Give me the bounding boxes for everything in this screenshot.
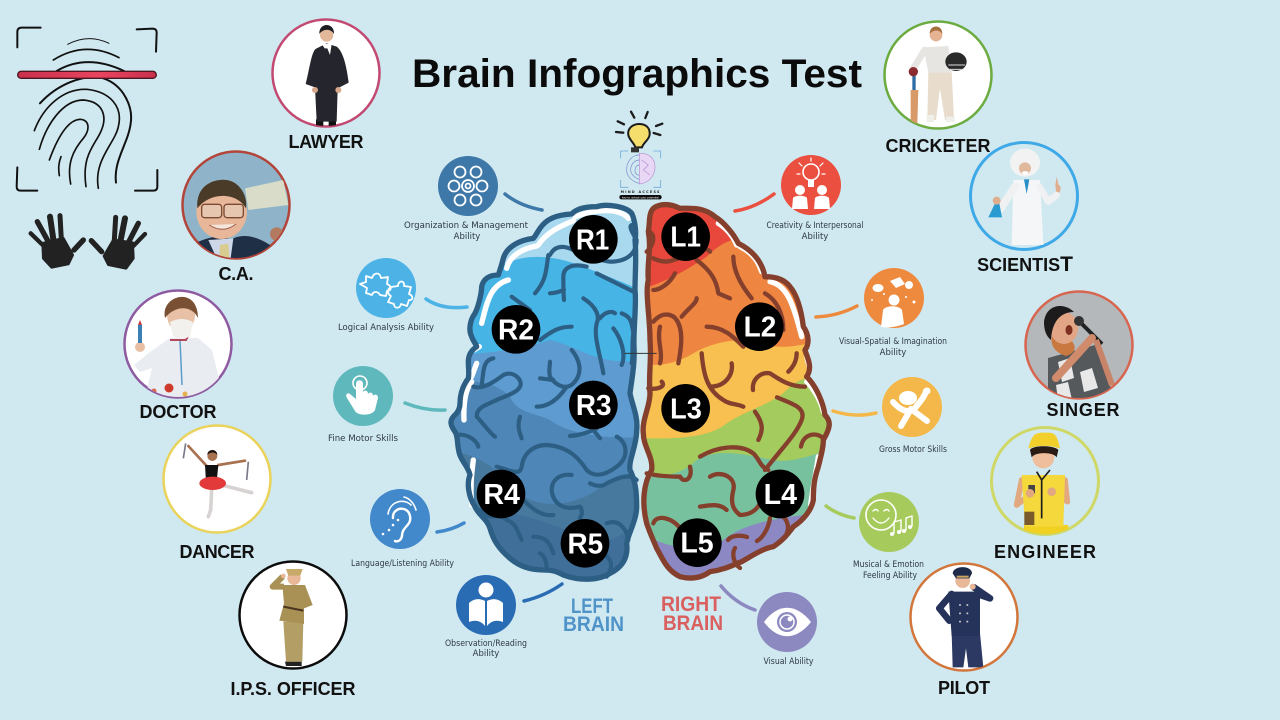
ability: creativity and interpersonal	[735, 155, 864, 242]
left hemisphere	[448, 202, 640, 582]
region badges: R5	[567, 528, 603, 560]
ability: organization and management: Organization & Management	[404, 221, 529, 231]
ability: logical analysis: Logical Analysis Ability	[338, 323, 434, 333]
ability: fine motor skills: Fine Motor Skills	[328, 434, 399, 444]
ability: organization and management: Ability	[454, 232, 480, 242]
ability: observation and reading: Observation/Reading	[445, 639, 527, 649]
ability: organization and management	[404, 156, 542, 242]
portrait: C.A.: C.A.	[218, 264, 254, 284]
ability: gross motor skills	[833, 377, 948, 455]
portrait: cricketer	[884, 22, 992, 156]
portrait: scientist: SCIENTIST	[977, 253, 1073, 276]
ability: musical and emotion feeling	[826, 492, 924, 581]
brain diagram	[440, 190, 840, 590]
portrait: singer: SINGER	[1046, 400, 1120, 420]
ability: musical and emotion feeling: Feeling Ability	[863, 571, 917, 581]
left brain label	[563, 595, 624, 636]
right hemisphere	[640, 190, 840, 590]
icon: fingerprint scanner	[17, 28, 157, 191]
ability: visual	[721, 586, 817, 667]
region badges: R4	[483, 479, 520, 511]
ability: logical analysis	[338, 258, 467, 333]
right brain label	[661, 593, 723, 635]
left brain label: LEFT	[571, 595, 613, 618]
ability: visual-spatial and imagination	[816, 268, 947, 358]
region badges: L2	[744, 312, 776, 344]
region badges: L4	[764, 479, 797, 511]
ability: creativity and interpersonal: Ability	[802, 232, 828, 242]
portrait: dancer	[164, 426, 270, 562]
right brain label: RIGHT	[661, 593, 721, 616]
region badges: R2	[498, 314, 534, 346]
portrait: lawyer: LAWYER	[288, 132, 364, 152]
ability: observation and reading	[445, 575, 562, 659]
portrait: engineer	[992, 428, 1098, 562]
portrait: dancer: DANCER	[180, 542, 254, 562]
ability: observation and reading: Ability	[473, 649, 499, 659]
portrait: singer	[1026, 292, 1132, 420]
logo: mind access bulb: MIND ACCESS	[621, 190, 660, 194]
portrait: doctor	[124, 290, 232, 422]
left brain label: BRAIN	[563, 613, 624, 636]
region badges: L5	[680, 528, 714, 560]
icon: hand prints	[31, 216, 145, 268]
region badges: R1	[576, 224, 609, 256]
ability: visual-spatial and imagination: Visual-Spatial & Imagination	[839, 337, 947, 347]
portrait: pilot	[910, 564, 1018, 698]
ability: fine motor skills	[328, 366, 445, 444]
portrait: engineer: ENGINEER	[994, 542, 1096, 562]
portrait: I.P.S. officer: I.P.S. OFFICER	[230, 679, 356, 699]
portrait: doctor: DOCTOR	[140, 402, 216, 422]
logo: mind access bulb: key to unlock your potential	[622, 195, 659, 199]
portrait: C.A.	[182, 152, 290, 284]
right brain label: BRAIN	[663, 612, 723, 635]
portrait: I.P.S. officer	[230, 562, 356, 699]
ability: visual: Visual Ability	[764, 657, 814, 667]
portrait: cricketer: CRICKETER	[886, 136, 990, 156]
ability: musical and emotion feeling: Musical & Emotion	[853, 560, 924, 570]
ability: gross motor skills: Gross Motor Skills	[879, 445, 948, 455]
logo: mind access bulb	[616, 112, 662, 199]
ability: visual-spatial and imagination: Ability	[880, 348, 906, 358]
portrait: scientist	[970, 142, 1078, 276]
title: Brain Infographics Test	[412, 52, 862, 96]
portrait: lawyer	[272, 20, 380, 152]
portrait: pilot: PILOT	[938, 678, 990, 698]
ability: language and listening: Language/Listening Ability	[351, 559, 454, 569]
region badges: L1	[670, 222, 701, 254]
region badges	[477, 212, 804, 568]
region badges: L3	[670, 393, 702, 425]
ability: language and listening	[351, 489, 464, 569]
region badges: R3	[576, 390, 611, 422]
ability: creativity and interpersonal: Creativity & Interpersonal	[766, 221, 864, 231]
